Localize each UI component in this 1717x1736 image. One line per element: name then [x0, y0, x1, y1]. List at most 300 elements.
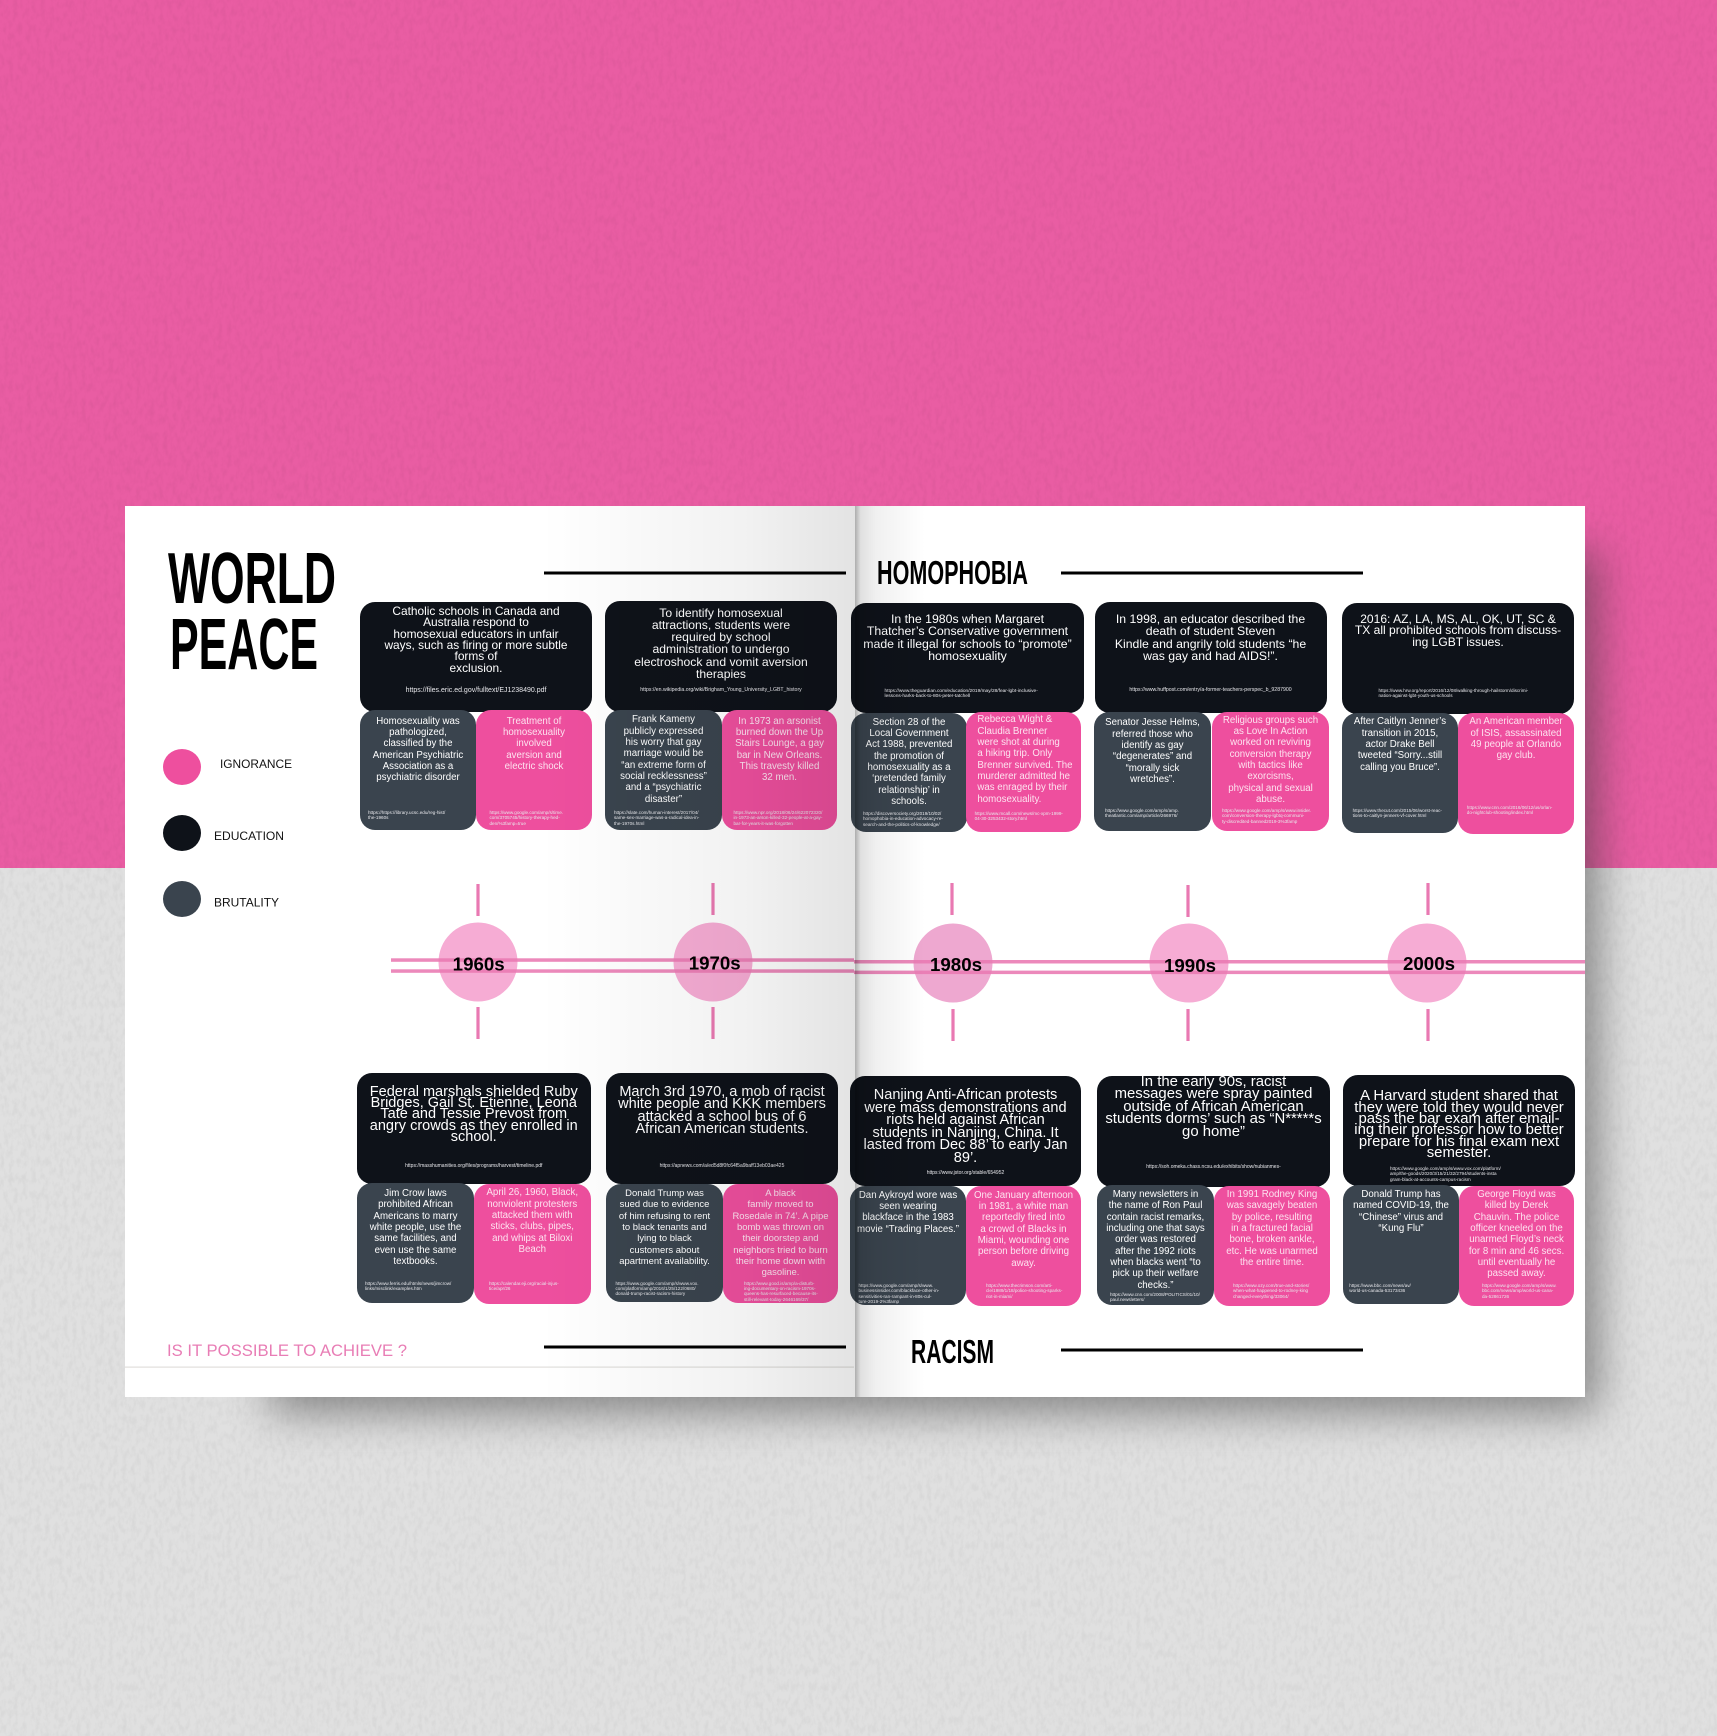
book shadow [270, 550, 1598, 1412]
brutality card: movie “Trading Places.” [857, 1224, 959, 1235]
brutality card: same facilities, and [374, 1233, 457, 1244]
brutality card: Jim Crow laws [384, 1188, 447, 1199]
card group: 1970s homophobia [605, 601, 837, 830]
brutality card [1342, 713, 1458, 833]
ignorance card: An American member [1469, 716, 1563, 727]
background: grey lower half [0, 868, 1717, 1736]
brutality card: https://www.google.com/amp/s/www. [858, 1283, 933, 1288]
ignorance card: do-nightclub-shooting/index.html [1467, 810, 1533, 815]
decade labels: 2000s [1403, 953, 1455, 974]
ignorance card: were shot at during [977, 737, 1060, 748]
brutality card: named COVID-19, the [1353, 1200, 1449, 1211]
ignorance card: 04-30-3253432-story.html [975, 816, 1027, 821]
ignorance card: https://www.good.is/amp/a-disturb- [744, 1280, 814, 1286]
card group: 1990s homophobia [1094, 602, 1329, 831]
education card: outside of African American [1123, 1099, 1304, 1115]
ignorance card: electric shock [505, 761, 563, 772]
ignorance card: still-relevant-today-2646169/37/ [744, 1297, 808, 1302]
ignorance card: gay club. [1497, 750, 1535, 761]
card group: 1960s homophobia [360, 602, 592, 830]
ignorance card: abuse. [1256, 794, 1285, 805]
education card: In the 1980s when Margaret [891, 612, 1044, 626]
brutality card: tweeted “Sorry...still [1358, 750, 1442, 761]
ignorance card: when-what-happened-to-rodney-king [1233, 1288, 1308, 1293]
ignorance card: and whips at Biloxi [492, 1233, 572, 1244]
heading: homophobia [544, 554, 1363, 591]
brutality card: publicly expressed [624, 726, 703, 737]
heading: racism [544, 1333, 1363, 1370]
education card: messages were spray painted [1115, 1086, 1312, 1102]
legend: education [163, 815, 284, 851]
brutality card: even use the same [375, 1245, 456, 1256]
ignorance card: com/3705745/history-therapy-hed- [490, 815, 560, 820]
brutality card: world-us-canada-53173436 [1349, 1288, 1405, 1293]
timeline circles [438, 922, 1466, 1002]
education card: https://www.google.com/amp/s/www.vox.com/platform/ [1390, 1166, 1501, 1171]
ignorance card: conversion therapy [1230, 749, 1311, 760]
brutality card: referred those who [1112, 729, 1193, 740]
decade labels: 1970s [689, 952, 741, 973]
education card: Australia respond to [423, 615, 529, 629]
ignorance card: murderer admitted he [977, 771, 1070, 782]
brutality card: Donald Trump has [1361, 1189, 1441, 1200]
education card: white people and KKK members [618, 1096, 826, 1112]
brutality card [605, 710, 722, 830]
brutality card: Section 28 of the [873, 717, 945, 728]
education card: lasted from Dec 88’ to early Jan [863, 1137, 1068, 1153]
brutality card [850, 1186, 966, 1305]
brutality card: disaster” [645, 794, 682, 805]
subtitle: IS IT POSSIBLE TO ACHIEVE ? [167, 1342, 407, 1360]
brutality card: tions-to-caitlyn-jenners-vf-cover.html [1353, 813, 1426, 818]
education card: go home” [1182, 1124, 1245, 1140]
brutality card: https://discoversociety.org/2019/10/02/ [863, 811, 941, 816]
brutality card: businessinsider.com/blackface-other-in- [858, 1288, 939, 1293]
ignorance card: changed-everything/33064/ [1233, 1294, 1289, 1299]
footer rule [125, 1366, 854, 1368]
brutality card: checks.” [1137, 1280, 1174, 1291]
ignorance card: https://www.ozy.com/true-and-stories/ [1233, 1283, 1309, 1288]
ignorance card: bomb was thrown on [737, 1222, 824, 1233]
ignorance card: https://calendar.eji.org/racial-injus- [489, 1280, 559, 1286]
ignorance card: attacked them with [492, 1210, 573, 1221]
education card: Thatcher’s Conservative government [867, 624, 1068, 638]
ignorance card: their doorstep and [742, 1233, 819, 1244]
legend [163, 749, 292, 917]
education card: exclusion. [450, 661, 502, 675]
ignorance card: burned down the Up [736, 727, 823, 738]
brutality card: “morally sick [1126, 763, 1179, 774]
education card: 2016: AZ, LA, MS, AL, OK, UT, SC & [1360, 612, 1556, 626]
education card [606, 1073, 838, 1184]
ignorance card: homosexuality. [977, 794, 1041, 805]
ignorance card: Chauvin. The police [1474, 1212, 1559, 1223]
card group: 1960s racism [357, 1073, 591, 1304]
brutality card: Dan Aykroyd wore was [859, 1190, 957, 1201]
brutality card: of him refusing to rent [619, 1211, 710, 1222]
ignorance card: officer kneeled on the [1470, 1223, 1563, 1234]
education card: https://www.hrw.org/report/2016/12/08/walking-through-hailstorm/discrimi- [1378, 688, 1528, 693]
education card: therapies [696, 667, 746, 681]
brutality card: https://www.ferris.edu/htmls/news/jimcrow/ [365, 1280, 451, 1286]
ignorance card: unarmed Floyd’s neck [1469, 1234, 1564, 1245]
brutality card: After Caitlyn Jenner’s [1354, 716, 1446, 727]
brutality card: sensitivities-ran-rampant-in-80s-cul- [858, 1294, 932, 1299]
card group: 2000s homophobia [1342, 603, 1574, 834]
ignorance card: the entire time. [1240, 1257, 1304, 1268]
brutality card: Act 1988, prevented [866, 739, 952, 750]
brutality card: customers about [630, 1245, 699, 1256]
background: pink upper half [0, 0, 1717, 868]
ignorance card [474, 1184, 590, 1304]
brutality card: https://www.google.com/amp/s/amp. [1105, 808, 1179, 813]
brutality card: marriage would be [624, 748, 703, 759]
ignorance card: reportedly fired into [982, 1212, 1065, 1223]
title [168, 538, 336, 685]
ignorance card: bone, broken ankle, [1229, 1234, 1315, 1245]
decade labels: 1980s [930, 954, 982, 975]
brutality card: after the 1992 riots [1115, 1246, 1196, 1257]
ignorance card: https://www.google.com/amp/s/www.insider. [1222, 808, 1311, 813]
education card: https://www.huffpost.com/entry/a-former-teachers-perspec_b_9287900 [1129, 687, 1292, 693]
education card: school. [451, 1129, 497, 1145]
brutality card: https://slate.com/human-interest/2017/04/ [614, 810, 699, 815]
ignorance card: person before driving [978, 1246, 1069, 1257]
ignorance card: worked on reviving [1230, 737, 1311, 748]
brutality card: the-1960s [368, 815, 388, 820]
education card: Federal marshals shielded Ruby [370, 1084, 578, 1100]
ignorance card: for 8 min and 46 secs. [1469, 1246, 1564, 1257]
brutality card: seen wearing [879, 1201, 937, 1212]
ignorance card: in a fractured facial [1231, 1223, 1313, 1234]
brutality card: “degenerates” and [1113, 751, 1192, 762]
ignorance card: until eventually he [1478, 1257, 1555, 1268]
education card: https://apnews.com/a/ed5d8f0fc64f5a9baff13eb03ae425 [660, 1163, 784, 1169]
ignorance card: bar-for-years-it-was-forgotten [734, 821, 793, 826]
brutality card: wretches”. [1130, 774, 1175, 785]
ignorance card [476, 710, 592, 830]
brutality card: Frank Kameny [632, 714, 695, 725]
education card: pass the bar exam after email- [1358, 1111, 1560, 1127]
ignorance card: In 1973 an arsonist [738, 716, 821, 727]
education card: forms of [455, 649, 497, 663]
brutality card: blackface in the 1983 [862, 1212, 954, 1223]
card group: 1990s racism [1097, 1076, 1330, 1306]
ignorance card: by police, resulting [1232, 1212, 1312, 1223]
legend: ignorance: IGNORANCE [220, 757, 292, 771]
education card: 89’. [954, 1150, 977, 1166]
ignorance card: a crowd of Blacks in [980, 1224, 1067, 1235]
brutality card [1343, 1185, 1459, 1304]
brutality card: https://www.bbc.com/news/av/ [1349, 1283, 1411, 1288]
brutality card: links/misclink/examples.htm [365, 1286, 422, 1291]
ignorance card: Claudia Brenner [977, 726, 1047, 737]
education card: made it illegal for schools to “promote” [863, 636, 1072, 650]
brutality card: calling you Bruce”. [1360, 762, 1440, 773]
open book spread [125, 506, 1585, 1397]
ignorance card: Miami, wounding one [978, 1235, 1069, 1246]
brutality card: https://www.cnn.com/2008/POLITICS/01/10/ [1110, 1292, 1200, 1297]
brutality card: paul.newsletters/ [1110, 1297, 1144, 1302]
right page spine shading [855, 506, 925, 1397]
education card [1342, 603, 1574, 714]
brutality card: Many newsletters in [1113, 1189, 1198, 1200]
heading: racism: RACISM [911, 1333, 994, 1370]
ignorance card: https://www.mcall.com/news/mc-xpm-1999- [975, 811, 1063, 816]
ignorance card: sticks, clubs, pipes, [491, 1221, 574, 1232]
brutality card: textbooks. [393, 1256, 438, 1267]
brutality card: “Chinese” virus and [1359, 1212, 1443, 1223]
brutality card: Americans to marry [374, 1211, 457, 1222]
education card: attractions, students were [652, 618, 790, 632]
brutality card [1094, 712, 1211, 831]
card group: 2000s racism [1343, 1075, 1575, 1306]
brutality card: prohibited African [378, 1199, 453, 1210]
ignorance card: neighbors tried to burn [733, 1245, 828, 1256]
brutality card: pick up their welfare [1112, 1268, 1199, 1279]
ignorance card: a hiking trip. Only [977, 748, 1052, 759]
brutality card: ture-2019-2%3famp [858, 1299, 899, 1304]
ignorance card: com/conversion-therapy-lgbtq-communi- [1222, 813, 1304, 818]
ignorance card: Religious groups such [1223, 715, 1318, 726]
education card: Catholic schools in Canada and [392, 604, 560, 618]
brutality card: Local Government [869, 728, 949, 739]
ignorance card: https://www.google.com/amp/s/www. [1482, 1283, 1557, 1288]
brutality card [357, 1183, 474, 1303]
education card: https://files.eric.ed.gov/fulltext/EJ1238490.pdf [406, 687, 546, 694]
ignorance card: with tactics like [1238, 760, 1303, 771]
education card: were mass demonstrations and [864, 1100, 1067, 1116]
ignorance card [723, 1184, 838, 1303]
ignorance card: George Floyd was [1477, 1189, 1556, 1200]
education card: electroshock and vomit aversion [634, 655, 808, 669]
brutality card: transition in 2015, [1362, 728, 1438, 739]
ignorance card: A black [765, 1188, 796, 1199]
ignorance card [1459, 1186, 1574, 1306]
left page spine shading [540, 506, 855, 1397]
brutality card: com/platform/amp/2016/1/25/122/0680/ [616, 1286, 696, 1291]
ignorance card: queens-has-resurfaced-because-its- [744, 1291, 818, 1296]
education card [357, 1073, 590, 1184]
brutality card [606, 1184, 723, 1302]
brutality card: identify as gay [1122, 740, 1183, 751]
education card: administration to undergo [652, 642, 790, 656]
title: WORLD [168, 538, 336, 619]
education card [1343, 1075, 1575, 1186]
education card: To identify homosexual [659, 606, 783, 620]
ignorance card [1458, 713, 1574, 834]
education card: angry crowds as they enrolled in [370, 1118, 578, 1134]
ignorance card: etc. He was unarmed [1226, 1246, 1318, 1257]
ignorance card: Rebecca Wight & [977, 714, 1052, 725]
education card: Nanjing Anti-African protests [874, 1087, 1057, 1103]
ignorance card: Beach [519, 1244, 546, 1255]
education card: gram-black-at-accounts-campus-racism [1390, 1177, 1471, 1182]
education card: https://soh.omeka.chass.ncsu.edu/exhibits/show/nubianmes- [1146, 1164, 1281, 1170]
card group: 1980s homophobia [851, 603, 1084, 832]
heading: homophobia: HOMOPHOBIA [877, 554, 1028, 591]
brutality card: https://https://library.ucsc.edu/reg-hist/ [368, 810, 445, 815]
education card: they were told they would never [1354, 1100, 1564, 1116]
ignorance card: bbc.com/news/amp/world-us-cana- [1482, 1288, 1553, 1293]
ignorance card: This travesty killed [740, 761, 819, 772]
brutality card: apartment availability. [619, 1256, 710, 1267]
ignorance card: https://www.google.com/amp/s/time. [490, 810, 563, 815]
ignorance card: physical and sexual [1228, 783, 1313, 794]
education card: homosexual educators in unfair [393, 627, 559, 641]
brutality card: the-1970s.html [614, 821, 644, 826]
education card: semester. [1427, 1145, 1491, 1161]
brutality card: white people, use the [370, 1222, 461, 1233]
education card: Kindle and angrily told students “he [1115, 636, 1306, 650]
education card: was gay and had AIDS!”. [1143, 649, 1278, 663]
brutality card: ‘pretended family [872, 773, 946, 784]
ignorance card: 32 men. [762, 772, 797, 783]
brutality card: social recklessness” [620, 771, 707, 782]
brutality card: sued due to evidence [620, 1199, 709, 1210]
education card: https://en.wikipedia.org/wiki/Brigham_Young_University_LGBT_history [640, 687, 802, 693]
education card: nation-against-lgbt-youth-us-schools [1378, 693, 1453, 698]
education card: ways, such as firing or more subtle [384, 638, 568, 652]
brutality card: order was restored [1115, 1234, 1196, 1245]
brutality card: “an extreme form of [621, 760, 706, 771]
legend: education: EDUCATION [214, 829, 284, 843]
ignorance card: nonviolent protesters [487, 1199, 577, 1210]
brutality card: American Psychiatric [373, 750, 463, 761]
ignorance card [966, 712, 1081, 832]
ignorance card: https://www.npr.org/2018/06/24/622072320/ [734, 810, 822, 815]
brutality card: same-sex-marriage-was-a-radical-idea-in- [614, 815, 699, 820]
timeline [391, 883, 1585, 1041]
ignorance card: in 1981, a white man [979, 1201, 1068, 1212]
brutality card: schools. [891, 796, 927, 807]
ignorance card: ty-discredited-banned2019-3%3famp [1222, 819, 1297, 824]
timeline ticks [476, 883, 1430, 1041]
ignorance card: family moved to [747, 1199, 814, 1210]
education card [360, 602, 592, 712]
card group: 1980s racism [850, 1076, 1081, 1306]
ignorance card: exorcisms, [1247, 771, 1294, 782]
education card: In 1998, an educator described the [1116, 612, 1305, 626]
education card: required by school [671, 630, 771, 644]
timeline rails [391, 958, 1585, 974]
brutality card: pathologized, [389, 727, 447, 738]
ignorance card: killed by Derek [1485, 1200, 1548, 1211]
ignorance card: Brenner survived. The [977, 760, 1073, 771]
education card [1097, 1076, 1330, 1187]
brutality card: Senator Jesse Helms, [1105, 717, 1200, 728]
legend: brutality: BRUTALITY [214, 896, 279, 910]
brutality card: Association as a [383, 761, 453, 772]
education card: homosexuality [928, 649, 1007, 663]
education card [1094, 602, 1326, 713]
education card: African American students. [635, 1121, 809, 1137]
ignorance card: da-52861726 [1482, 1294, 1509, 1299]
education card: attacked a school bus of 6 [637, 1109, 806, 1125]
ignorance card: passed away. [1487, 1268, 1546, 1279]
decade labels: 1960s [453, 954, 505, 975]
ignorance card: 49 people at Orlando [1471, 739, 1561, 750]
education card [851, 603, 1084, 713]
brutality card: https://www.google.com/amp/s/www.vox. [616, 1280, 698, 1286]
education card: https://www.theguardian.com/education/2019/may/28/fear-lgbt-inclusive- [884, 689, 1038, 694]
ignorance card: https://www.thecrimson.com/arti- [986, 1283, 1052, 1288]
brutality card: to black tenants and [622, 1222, 707, 1233]
education card: death of student Steven [1146, 624, 1275, 638]
education card [850, 1076, 1081, 1186]
brutality card: classified by the [384, 738, 452, 749]
brutality card: contain racist remarks, [1107, 1212, 1204, 1223]
ignorance card: gasoline. [762, 1267, 799, 1278]
brutality card: and a “psychiatric [626, 782, 701, 793]
ignorance card: tice/apr/26 [489, 1286, 510, 1291]
ignorance card: April 26, 1960, Black, [486, 1187, 578, 1198]
legend: brutality [163, 881, 279, 917]
ignorance card: was enraged by their [977, 782, 1067, 793]
education card: https://www.jstor.org/stable/654952 [927, 1170, 1004, 1176]
education card: March 3rd 1970, a mob of racist [619, 1084, 825, 1100]
ignorance card: away. [1011, 1258, 1036, 1269]
brutality card: theatlantic.com/amp/article/266976/ [1105, 813, 1178, 818]
brutality card: psychiatric disorder [376, 772, 460, 783]
brutality card: Donald Trump was [625, 1188, 704, 1199]
ignorance card: aversion and [506, 750, 562, 761]
ignorance card: In 1991 Rodney King [1227, 1189, 1317, 1200]
education card: ing LGBT issues. [1412, 635, 1504, 649]
brutality card: including one that says [1106, 1223, 1205, 1234]
legend: ignorance [163, 749, 292, 785]
ignorance card: https://www.cnn.com/2016/06/12/us/orlan- [1467, 804, 1552, 810]
title: PEACE [170, 604, 318, 685]
decade labels: 1990s [1164, 955, 1216, 976]
brutality card: the promotion of [874, 751, 944, 762]
education card: lessons-harks-back-to-80s-peter-tatchell [884, 694, 970, 699]
ignorance card: One January afternoon [974, 1190, 1073, 1201]
ignorance card: homosexuality [503, 727, 565, 738]
education card: prepare for his final exam next [1359, 1134, 1559, 1150]
education card [605, 601, 837, 712]
education card: students dorms’ such as “N*****s [1105, 1111, 1322, 1127]
brutality card [1097, 1185, 1214, 1305]
ignorance card: bar in New Orleans. [737, 750, 822, 761]
ignorance card: Treatment of [507, 716, 561, 727]
ignorance card: was savagely beaten [1227, 1200, 1317, 1211]
ignorance card: Rosedale in 74’. A pipe [732, 1211, 829, 1222]
decade labels [453, 952, 1455, 976]
ignorance card: in-1973-an-arson-killed-32-people-at-a-gay- [734, 815, 822, 820]
brutality card: when blacks went “to [1110, 1257, 1201, 1268]
brutality card: his worry that gay [626, 737, 701, 748]
brutality card: https://www.thecut.com/2015/06/worst-reac- [1353, 808, 1442, 813]
ignorance card [1212, 712, 1329, 831]
education card: amp/the-goods/2020/3/15/21/32/2794/students-insta [1390, 1171, 1496, 1176]
card group: 1970s racism [606, 1073, 838, 1303]
brutality card: lying to black [637, 1233, 692, 1244]
brutality card: “Kung Flu” [1378, 1223, 1424, 1234]
ignorance card: as Love In Action [1234, 726, 1307, 737]
ignorance card: den/%3famp=true [490, 821, 526, 826]
ignorance card: ing-documentary-on-racism-1970s- [744, 1286, 816, 1291]
education card: riots held against African [886, 1112, 1045, 1128]
ignorance card [966, 1186, 1081, 1306]
education card: Tate and Tessie Prevost from [380, 1106, 567, 1122]
education card: TX all prohibited schools from discuss- [1355, 623, 1561, 637]
brutality card: Homosexuality was [376, 716, 460, 727]
brutality card: homosexuality as a [868, 762, 950, 773]
ignorance card: involved [516, 738, 552, 749]
ignorance card: cle/1989/1/18/police-shooting-sparks- [986, 1288, 1062, 1293]
brutality card: relationship’ in [878, 785, 940, 796]
